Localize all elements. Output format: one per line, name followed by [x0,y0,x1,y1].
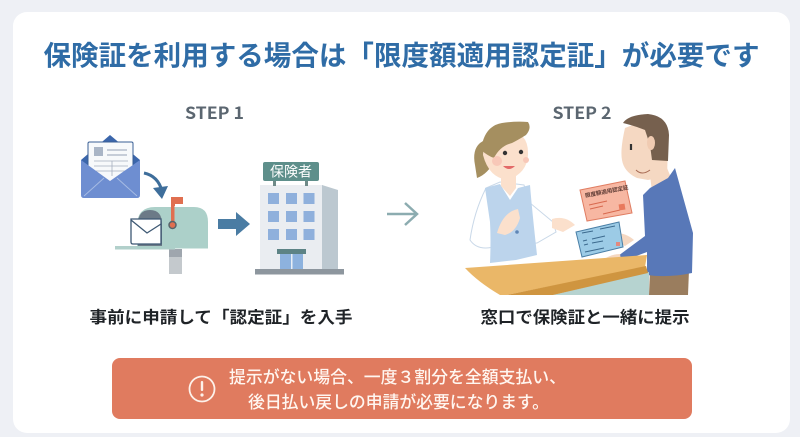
illustration: counter staff [470,122,575,263]
icon: open envelope with form [81,135,140,198]
callout text: 提示がない場合、一度３割分を全額支払い、 [229,367,566,387]
title: 保険証を利用する場合は「限度額適用認定証」が必要です [44,40,760,71]
staff: hands [497,209,520,235]
callout text: 後日払い戻しの申請が必要になります。 [248,392,549,412]
staff: hair top [481,122,530,158]
icon: insurer building [255,162,344,274]
arrow: envelope to mailbox [144,173,168,199]
icon: mailbox [115,197,208,274]
arrow: mailbox to insurer [218,212,250,236]
icon: exclamation [190,376,214,402]
callout: warning [112,358,692,419]
staff: vest [485,184,537,263]
document: limit certificate [580,181,632,221]
caption: step 2: 窓口で保険証と一緒に提示 [480,308,690,327]
caption: step 1: 事前に申請して「認定証」を入手 [90,307,352,327]
customer: hands [616,233,634,246]
heading: step 2: STEP 2 [552,100,612,124]
document: insurance card [576,222,623,257]
staff: blouse and arms [470,182,556,248]
arrow: step 1 to step 2 [387,203,417,225]
staff: face [483,131,528,180]
customer: head [621,118,668,180]
sign: insurer: 保険者 [270,164,312,180]
illustration: customer [600,114,693,295]
customer: trousers [649,270,689,295]
staff: hair back and ponytail [474,130,500,178]
customer: hair [623,114,669,161]
heading: step 1: STEP 1 [185,100,244,124]
document: limit certificate: 限度額適用認定証 [584,183,630,199]
illustration: counter desk [465,255,649,295]
customer: sweater [618,168,693,276]
callout text [229,367,566,412]
